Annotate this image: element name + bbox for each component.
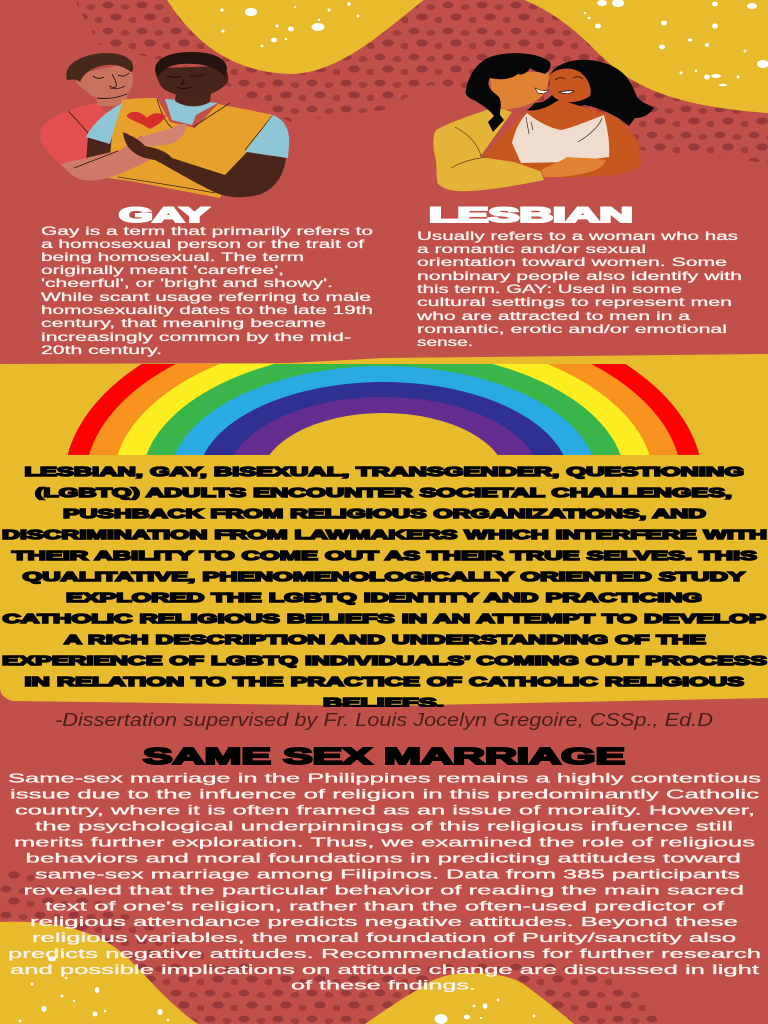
text block: study abstract: A RICH DESCRIPTION AND UNDERSTANDING OF THE	[64, 632, 707, 647]
left woman hair	[465, 53, 551, 132]
dotted pattern: top	[75, 0, 768, 163]
text block: same-sex marriage study: religious variables, the moral foundation of Purity/sanctity also	[32, 930, 736, 945]
text block: same-sex marriage study: merits further exploration. Thus, we examined the role of religious	[14, 834, 755, 850]
heading: LESBIAN: LESBIAN	[429, 204, 633, 227]
left man arm	[60, 135, 150, 181]
rainbow	[68, 364, 700, 455]
text block: study abstract: EXPERIENCE OF LGBTQ INDIVIDUALS’ COMING OUT PROCESS	[2, 653, 768, 668]
heading: GAY: GAY	[119, 204, 209, 227]
text block: lesbian definition	[415, 229, 742, 349]
text block: study abstract: EXPLORED THE LGBTQ IDENTITY AND PRACTICING	[66, 590, 702, 605]
text block: lesbian definition: a romantic and/or sexual	[417, 242, 646, 256]
blue shirt	[86, 103, 122, 144]
text block: same-sex marriage study: revealed that the particular behavior of reading the main sacred	[24, 882, 744, 898]
text block: lesbian definition: cultural settings to represent men	[417, 295, 732, 309]
text block: same-sex marriage study: country, where it is often framed as an issue of morality. However,	[15, 802, 755, 818]
yellow blob: top centre	[167, 0, 424, 74]
text block: gay definition: century, that meaning became	[41, 316, 327, 330]
text block: gay definition: a homosexual person or the trait of	[41, 237, 365, 251]
text block: same-sex marriage study: issue due to the infuence of religion in this predominantly Catholic	[10, 786, 760, 802]
text block: study abstract: DISCRIMINATION FROM LAWMAKERS WHICH INTERFERE WITH	[2, 527, 767, 542]
text block: lesbian definition: who are attracted to men in a	[415, 309, 691, 323]
right woman body	[482, 100, 641, 178]
text block: lesbian definition: romantic, erotic and/or emotional	[417, 322, 727, 336]
illustration: lesbian couple	[433, 53, 654, 191]
text block: study abstract: LESBIAN, GAY, BISEXUAL, TRANSGENDER, QUESTIONING	[24, 464, 744, 479]
text block: lesbian definition: orientation toward women. Some	[417, 255, 728, 269]
text block: study abstract: PUSHBACK FROM RELIGIOUS ORGANIZATIONS, AND	[63, 506, 706, 521]
orange vest	[108, 98, 274, 198]
right woman neck shadow	[526, 100, 558, 111]
text block: study abstract: CATHOLIC RELIGIOUS BELIEFS IN AN ATTEMPT TO DEVELOP	[2, 611, 767, 626]
text block: study abstract: THEIR ABILITY TO COME OUT AS THEIR TRUE SELVES. THIS	[12, 548, 758, 563]
text block: lesbian definition: nonbinary people also identify with	[417, 269, 742, 283]
hand	[541, 157, 606, 177]
left woman neck and face	[490, 72, 549, 110]
yellow blob: top right	[524, 0, 768, 113]
text block: same-sex marriage study	[8, 770, 761, 992]
left woman yellow top	[433, 107, 544, 191]
dress	[512, 113, 609, 163]
text block: study abstract: QUALITATIVE, PHENOMENOLOGICALLY ORIENTED STUDY	[22, 569, 746, 584]
text block: gay definition: 20th century.	[41, 343, 162, 357]
text block: gay definition: While scant usage referring to male	[41, 290, 372, 304]
left man neck and face	[95, 88, 128, 106]
text block: study abstract	[2, 464, 768, 710]
text block: study abstract: (LGBTQ) ADULTS ENCOUNTER SOCIETAL CHALLENGES,	[35, 485, 732, 500]
text block: same-sex marriage study: the psychological underpinnings of this religious infuence still	[35, 818, 733, 834]
text block: same-sex marriage study: and possible implications on attitude change are discussed in light	[10, 962, 760, 977]
text block: same-sex marriage study: of these fndings.	[291, 978, 476, 992]
text block: same-sex marriage study: behaviors and moral foundations in predicting attitudes toward	[26, 850, 741, 866]
text block: study abstract: IN RELATION TO THE PRACTICE OF CATHOLIC RELIGIOUS	[24, 674, 745, 689]
brown torso	[86, 135, 115, 165]
text block: same-sex marriage study: text of one's religion, rather than the often-used predictor of	[45, 898, 725, 914]
yellow blob: bottom right	[365, 973, 574, 1024]
text block: lesbian definition: sense.	[417, 335, 473, 349]
text block: same-sex marriage study: Same-sex marriage in the Philippines remains a highly contentious	[8, 770, 761, 786]
left man hand	[140, 124, 187, 146]
right woman hair back	[528, 60, 654, 126]
dotted pattern: bottom	[0, 870, 660, 1024]
text block: lesbian definition: this term. GAY: Used in some	[417, 282, 683, 296]
text block: same-sex marriage study: predicts negative attitudes. Recommendations for further research	[8, 946, 761, 961]
right woman face	[550, 68, 591, 102]
text block: gay definition: Gay is a term that primarily refers to	[41, 224, 374, 238]
text block: gay definition: increasingly common by the mid-	[41, 330, 351, 344]
text block: same-sex marriage study: religious attendance predicts negative attitudes. Beyond these	[30, 914, 738, 929]
heading: same sex marriage: SAME SEX MARRIAGE	[143, 743, 625, 769]
dark man neck and head	[175, 86, 212, 106]
dark man arm and hand	[123, 132, 286, 197]
illustration: gay couple	[40, 52, 289, 198]
text block: gay definition	[41, 224, 374, 357]
text block: gay definition: originally meant 'carefree',	[41, 263, 284, 277]
text block: gay definition: being homosexual. The term	[41, 250, 304, 264]
left man shirt	[40, 103, 108, 164]
heart	[127, 112, 166, 129]
text block: same-sex marriage study: same-sex marriage among Filipinos. Data from 385 participants	[35, 866, 740, 882]
text block: gay definition: 'cheerful', or 'bright and showy'.	[41, 276, 333, 290]
yellow blob: bottom left	[0, 922, 198, 1024]
attribution line: -Dissertation supervised by Fr. Louis Jocelyn Gregoire, CSSp., Ed.D	[55, 710, 713, 730]
text block: study abstract: BELIEFS.	[323, 695, 444, 710]
yellow middle band	[0, 354, 768, 706]
text block: lesbian definition: Usually refers to a woman who has	[417, 229, 738, 243]
text block: gay definition: homosexuality dates to the late 19th	[41, 303, 373, 317]
